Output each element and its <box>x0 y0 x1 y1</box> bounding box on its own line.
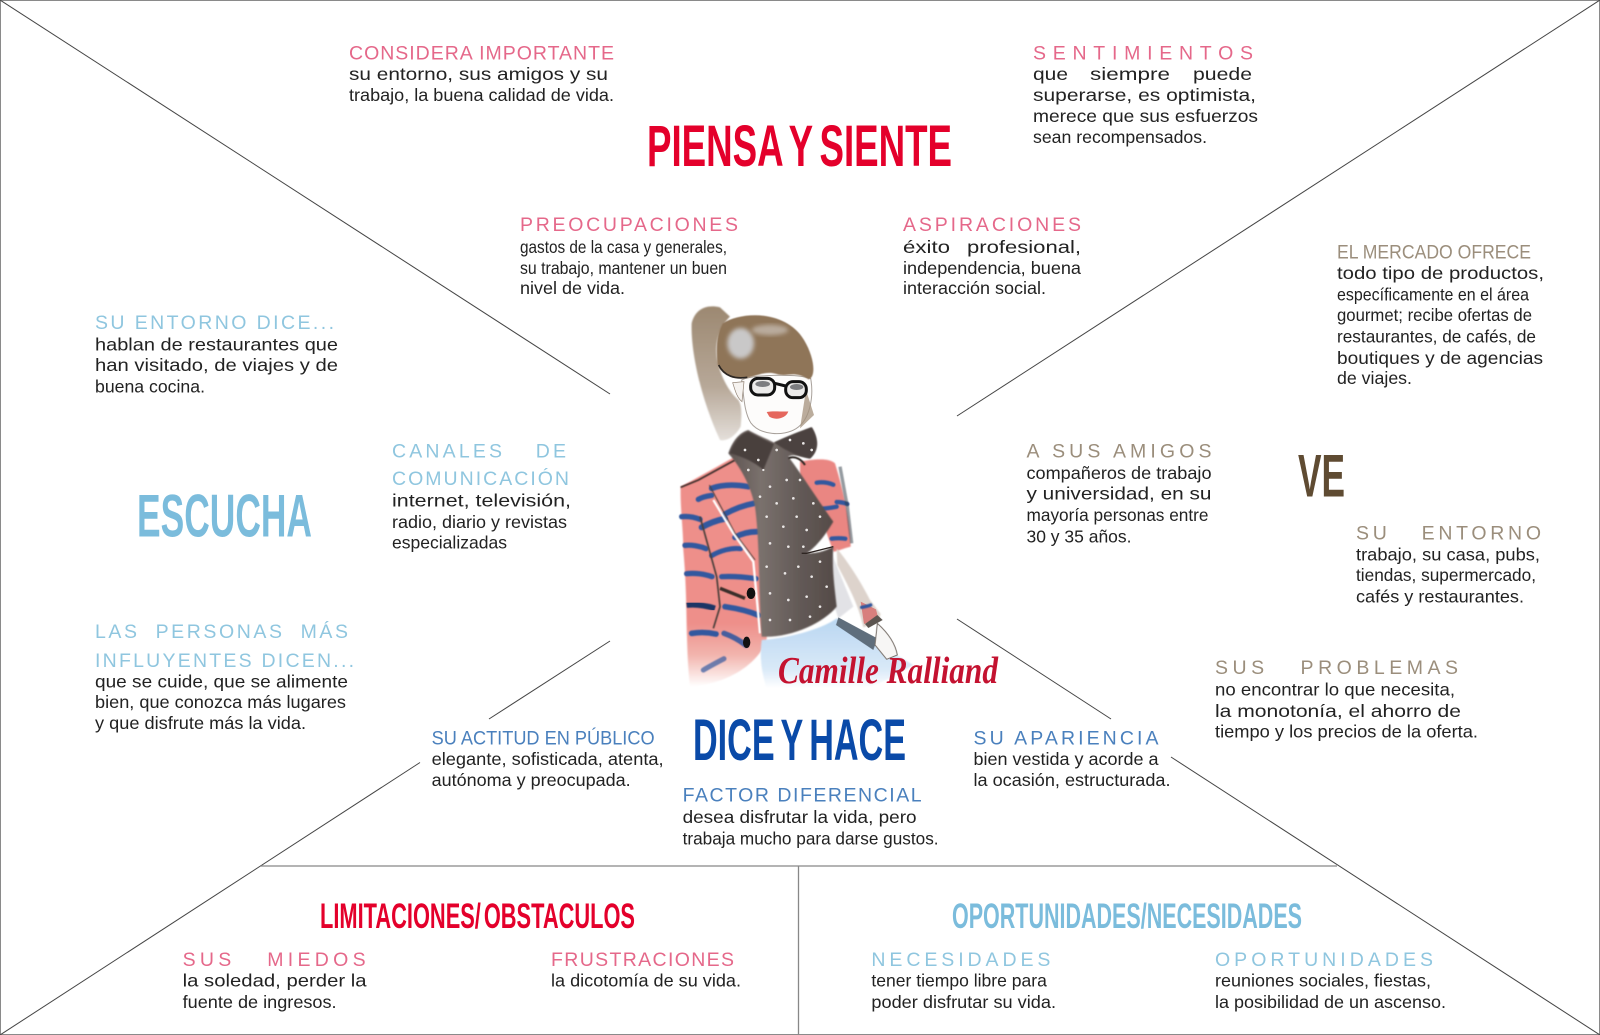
text block: el mercado ofrece: gourmet; recibe ofertas de <box>1337 305 1532 325</box>
text block: preocupaciones: gastos de la casa y generales, <box>520 237 727 257</box>
text block: sentimientos: superarse, es optimista, <box>1033 85 1256 105</box>
text block: aspiraciones: interacción social. <box>903 278 1046 298</box>
text block: su entorno dice <box>95 312 338 397</box>
text block: a sus amigos: A SUS AMIGOS <box>1026 441 1212 463</box>
text block: aspiraciones: independencia, buena <box>903 258 1081 278</box>
shape: jacket body <box>681 457 770 687</box>
text block: su actitud en público: autónoma y preocupada. <box>432 770 631 790</box>
text block: sus miedos: fuente de ingresos. <box>183 992 337 1012</box>
text block: factor diferencial <box>683 785 939 849</box>
text block: a sus amigos: compañeros de trabajo <box>1026 463 1212 483</box>
text block: su actitud en público: elegante, sofisticada, atenta, <box>432 749 664 769</box>
text block: canales de comunicación <box>392 441 571 553</box>
title: LIMITACIONES/OBSTACULOS: LIMITACIONES/ OBSTACULOS <box>320 897 635 936</box>
text block: su entorno dice: han visitado, de viajes y de <box>95 355 338 375</box>
text block: su entorno <box>1356 523 1541 607</box>
text block: sus miedos: SUS MIEDOS <box>183 949 366 971</box>
text block: necesidades: NECESIDADES <box>871 949 1050 971</box>
icon: glasses <box>751 378 806 398</box>
text block: el mercado ofrece: EL MERCADO OFRECE <box>1337 242 1531 264</box>
illustration: Camille Ralliand portrait <box>681 306 999 692</box>
text block: las personas más influyentes: INFLUYENTES DICEN... <box>95 650 354 672</box>
text block: su entorno: cafés y restaurantes. <box>1356 587 1524 607</box>
text block: a sus amigos: mayoría personas entre <box>1026 505 1208 525</box>
text block: las personas más influyentes <box>95 620 354 733</box>
shape: hair <box>717 315 813 379</box>
text block: oportunidades: OPORTUNIDADES <box>1215 949 1433 971</box>
text block: necesidades <box>871 949 1056 1012</box>
text block: sus miedos <box>183 949 367 1012</box>
text block: factor diferencial: desea disfrutar la vida, pero <box>683 807 917 827</box>
title: ESCUCHA: ESCUCHA <box>137 482 312 550</box>
text block: su actitud en público: SU ACTITUD EN PÚBLICO <box>432 727 655 750</box>
text block: su entorno dice: buena cocina. <box>95 377 205 397</box>
text block: el mercado ofrece: boutiques y de agencias <box>1337 348 1543 368</box>
text block: frustraciones <box>551 949 741 991</box>
text block: su apariencia: SU APARIENCIA <box>974 728 1158 750</box>
text block: el mercado ofrece: todo tipo de productos, <box>1337 263 1544 283</box>
text block: su entorno: trabajo, su casa, pubs, <box>1356 545 1540 565</box>
text block: su actitud en público <box>432 727 664 790</box>
text block: sus problemas: la monotonía, el ahorro de <box>1215 701 1461 721</box>
text block: sentimientos: sean recompensados. <box>1033 127 1207 147</box>
icon: jacket buttons <box>743 588 755 648</box>
text block: considera importante <box>349 43 614 105</box>
text block: su apariencia: bien vestida y acorde a <box>974 749 1159 769</box>
text block: su entorno dice: SU ENTORNO DICE... <box>95 312 334 334</box>
text block: considera importante: trabajo, la buena calidad de vida. <box>349 85 614 105</box>
text block: sentimientos: SENTIMIENTOS <box>1033 43 1253 65</box>
text block: el mercado ofrece <box>1337 242 1544 388</box>
text block: canales de comunicación: COMUNICACIÓN <box>392 467 569 490</box>
text block: canales de comunicación: especializadas <box>392 533 507 553</box>
text block: a sus amigos <box>1026 441 1212 547</box>
text block: aspiraciones: profesional, <box>967 237 1081 257</box>
text block: las personas más influyentes: y que disfrute más la vida. <box>95 713 306 733</box>
shape: jacket edges <box>681 460 852 633</box>
title: OPORTUNIDADES/NECESIDADES: OPORTUNIDADES/NECESIDADES <box>952 897 1302 936</box>
shape: lips <box>767 411 788 419</box>
text block: las personas más influyentes: LAS PERSONAS MÁS <box>95 620 348 643</box>
shape: ponytail <box>692 306 741 440</box>
text block: oportunidades: reuniones sociales, fiestas, <box>1215 971 1431 991</box>
text block: el mercado ofrece: específicamente en el área <box>1337 285 1529 305</box>
text block: preocupaciones: nivel de vida. <box>520 278 625 298</box>
text block: necesidades: poder disfrutar su vida. <box>871 992 1056 1012</box>
text block: canales de comunicación: internet, televisión, <box>392 491 571 511</box>
text block: su entorno: SU ENTORNO <box>1356 523 1541 545</box>
title: PIENSA Y SIENTE: PIENSA Y SIENTE <box>647 114 952 179</box>
text block: canales de comunicación: radio, diario y revistas <box>392 512 567 532</box>
text block: frustraciones: la dicotomía de su vida. <box>551 971 741 991</box>
shape: scarf <box>728 427 837 637</box>
text block: preocupaciones <box>520 214 738 298</box>
shape: right sleeve <box>837 548 881 627</box>
text block: sentimientos: puede <box>1193 64 1252 84</box>
text block: considera importante: CONSIDERA IMPORTANTE <box>349 43 614 65</box>
text block: las personas más influyentes: que se cuide, que se alimente <box>95 672 348 692</box>
text block: sus problemas <box>1215 657 1478 742</box>
text block: preocupaciones: PREOCUPACIONES <box>520 214 738 236</box>
title: DICE Y HACE: DICE Y HACE <box>693 708 906 773</box>
shape: face <box>742 375 812 434</box>
text block: sentimientos: merece que sus esfuerzos <box>1033 106 1258 126</box>
text block: oportunidades: la posibilidad de un ascenso. <box>1215 992 1446 1012</box>
text block: su apariencia <box>974 728 1170 790</box>
text block: considera importante: su entorno, sus amigos y su <box>349 64 608 84</box>
text block: a sus amigos: y universidad, en su <box>1026 484 1212 504</box>
text block: sus miedos: la soledad, perder la <box>183 971 367 991</box>
text block: las personas más influyentes: bien, que conozca más lugares <box>95 692 346 712</box>
text block: necesidades: tener tiempo libre para <box>871 971 1047 991</box>
text block: preocupaciones: su trabajo, mantener un buen <box>520 258 727 278</box>
pattern: jacket blue stripes <box>682 482 871 670</box>
text block: sentimientos: siempre <box>1090 64 1170 84</box>
text block: oportunidades <box>1215 949 1446 1012</box>
text block: el mercado ofrece: de viajes. <box>1337 368 1412 388</box>
text block: el mercado ofrece: restaurantes, de cafés, de <box>1337 327 1536 347</box>
text block: su entorno dice: hablan de restaurantes que <box>95 335 338 355</box>
text block: factor diferencial: FACTOR DIFERENCIAL <box>683 785 922 807</box>
text block: sentimientos: que <box>1033 64 1068 84</box>
text block: aspiraciones: éxito <box>903 237 950 257</box>
text block: aspiraciones <box>903 214 1081 298</box>
signature: Camille Ralliand: Camille Ralliand <box>778 650 999 692</box>
text block: su entorno: tiendas, supermercado, <box>1356 565 1536 585</box>
text block: aspiraciones: ASPIRACIONES <box>903 214 1081 236</box>
text block: canales de comunicación: CANALES DE <box>392 441 566 463</box>
pattern: polka dots <box>744 439 828 621</box>
shape: skirt <box>761 618 913 688</box>
shape: blouse gap <box>832 553 853 618</box>
text block: sentimientos <box>1033 43 1258 147</box>
text block: sus problemas: SUS PROBLEMAS <box>1215 657 1458 679</box>
text block: factor diferencial: trabaja mucho para darse gustos. <box>683 829 939 849</box>
title: VE: VE <box>1298 442 1345 510</box>
text block: sus problemas: no encontrar lo que necesita, <box>1215 680 1455 700</box>
text block: a sus amigos: 30 y 35 años. <box>1026 527 1132 547</box>
text block: sus problemas: tiempo y los precios de la oferta. <box>1215 722 1478 742</box>
text block: frustraciones: FRUSTRACIONES <box>551 949 734 971</box>
text block: su apariencia: la ocasión, estructurada. <box>974 770 1170 790</box>
